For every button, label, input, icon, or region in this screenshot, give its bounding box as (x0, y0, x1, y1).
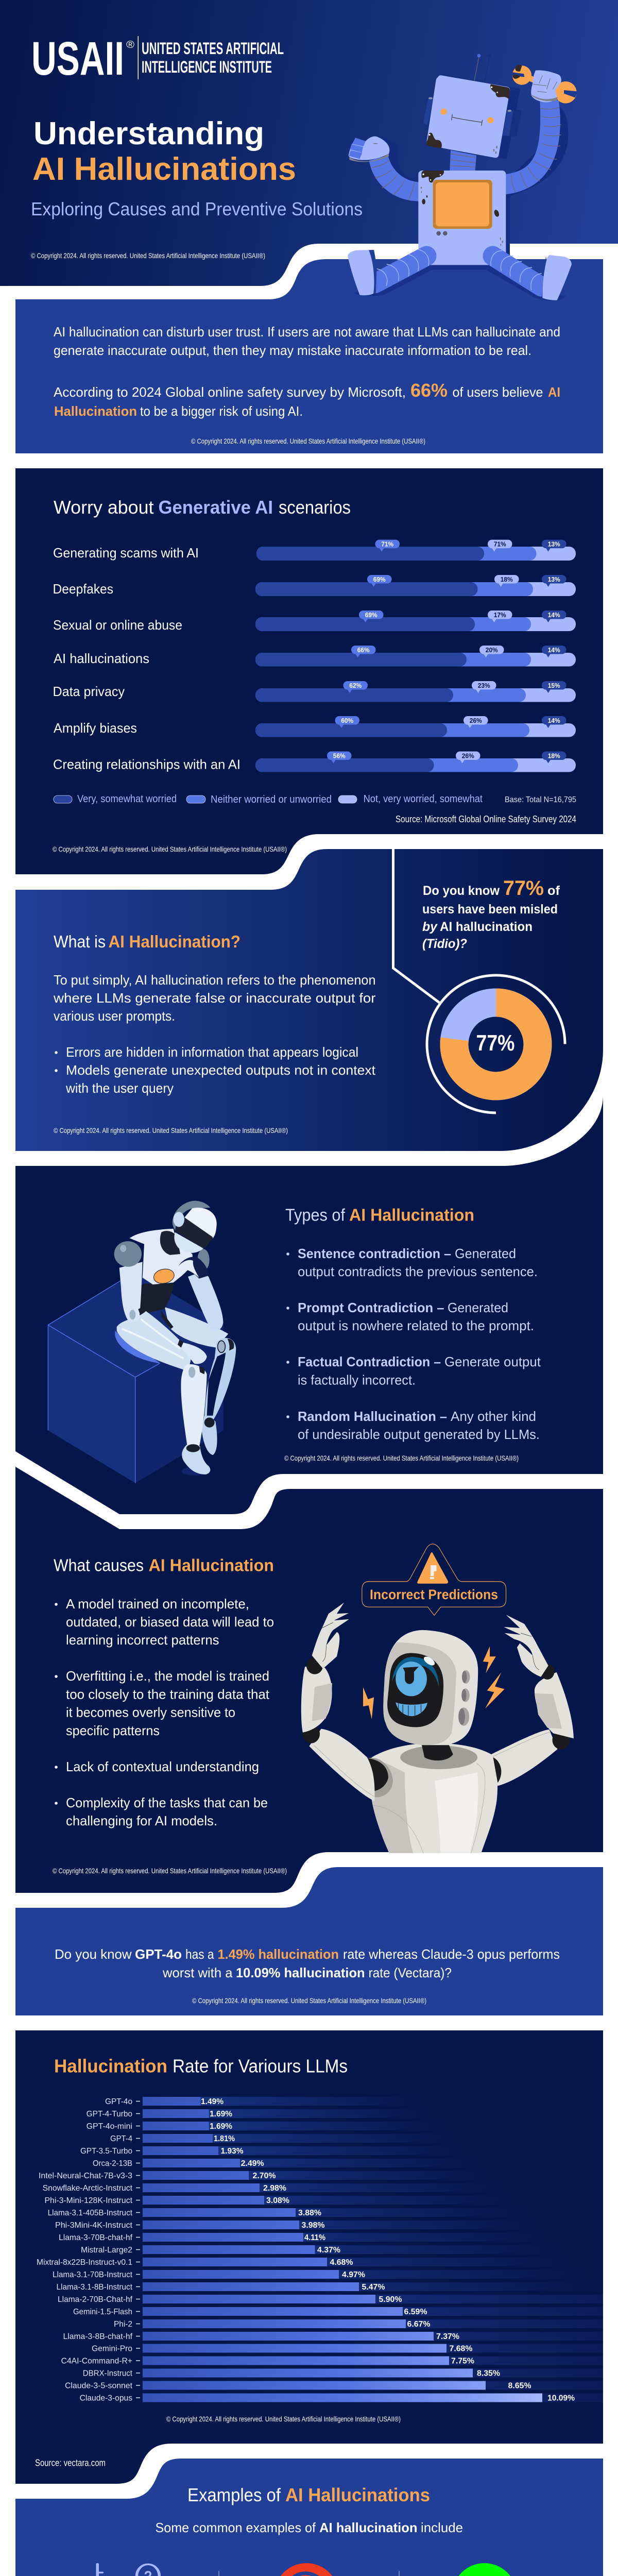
bar chart: hallucination rates: GPT-4-Turbo (87, 2110, 132, 2119)
legend: Neither worried or unworried (211, 794, 332, 805)
panel: Worry about Generative AI scenarios (15, 468, 603, 874)
heading: AI Hallucination (148, 1556, 274, 1574)
chart row: Creating relationships with an AI: 18% (548, 752, 560, 759)
logo: USAII (31, 32, 284, 85)
bar chart: hallucination rates: Llama-3.1-405B-Instruct (48, 2209, 133, 2217)
text block: user trust (54, 324, 560, 358)
icon: false negative cross (452, 2563, 517, 2576)
title: Understanding (33, 116, 264, 151)
chart row: Creating relationships with an AI: 56% (333, 752, 346, 759)
bar chart: hallucination rates: 1.49% (201, 2097, 224, 2106)
subheading: include (421, 2520, 463, 2535)
source note: Source: Microsoft Global Online Safety Survey 2024 (396, 814, 576, 824)
copyright: © Copyright 2024. All rights reserved. United States Artificial Intelligence Institute (USAII®) (166, 2415, 401, 2423)
bullet: Sentence contradiction: output contradicts the previous sentence. (298, 1264, 538, 1279)
chart row: AI hallucinations: 20% (486, 646, 498, 654)
bar chart: hallucination rates: 3.08% (266, 2196, 289, 2205)
text block: hallucination rates: rate (Vectara)? (369, 1965, 452, 1980)
bar chart: hallucination rates: 7.68% (449, 2344, 473, 2353)
text block: 66 percent: Hallucination (54, 403, 137, 419)
chart row: Sexual or online abuse: Sexual or online abuse (53, 617, 182, 633)
text block: 66 percent: 66% (410, 380, 448, 401)
text block: 66 percent (54, 380, 560, 419)
bar chart: hallucination rates: 7.37% (436, 2332, 459, 2341)
bullet: Prompt Contradiction: Prompt Contradiction – (298, 1300, 444, 1315)
bullet list: characteristics (55, 1044, 376, 1096)
bullet: Sentence contradiction (286, 1246, 538, 1279)
subtitle: Exploring Causes and Preventive Solutions (31, 198, 363, 219)
bar chart: hallucination rates: DBRX-Instruct (83, 2369, 133, 2378)
callout text: 77 percent: 77% (503, 877, 544, 900)
bar chart: hallucination rates: GPT-4o-mini (87, 2122, 132, 2131)
bullet list: characteristics: Models generate unexpected outputs not in context (66, 1062, 376, 1078)
chart row: Data privacy: 62% (349, 682, 362, 689)
heading: AI Hallucination? (108, 932, 241, 951)
bar chart: hallucination rates: Llama-3-8B-chat-hf (63, 2332, 133, 2341)
chart row: Creating relationships with an AI: 26% (462, 752, 474, 759)
heading (54, 932, 241, 951)
chart row: Generating scams with AI: 71% (494, 540, 506, 548)
text block: definition: To put simply, AI hallucination refers to the phenomenon (54, 972, 376, 988)
subheading: Some common examples of (156, 2520, 316, 2535)
bar chart: hallucination rates: 1.69% (210, 2110, 232, 2119)
bullet: Sentence contradiction: Sentence contradiction – (298, 1246, 451, 1261)
logo: USAII: ® (126, 40, 134, 50)
callout text: 77 percent: of (547, 884, 560, 898)
chart row: Amplify biases: 60% (341, 717, 354, 724)
panel: Hallucination Rate for Various LLMs (15, 2030, 603, 2484)
bar chart: hallucination rates: Phi-3-Mini-128K-Instruct (44, 2196, 133, 2205)
chart row: Creating relationships with an AI: Creating relationships with an AI (53, 756, 241, 772)
bullet: Random Hallucination (286, 1409, 540, 1442)
chart row: Generating scams with AI: 71% (381, 540, 394, 548)
text block: user trust: AI hallucination can disturb user trust. If users are not aware that LLMs can hallucinate and (54, 324, 560, 340)
chart row: Deepfakes: 18% (501, 575, 513, 583)
bar chart: hallucination rates: 7.75% (451, 2357, 474, 2366)
chart row: Generating scams with AI (53, 540, 576, 561)
copyright: © Copyright 2024. All rights reserved. United States Artificial Intelligence Institute (USAII®) (54, 1126, 288, 1134)
logo: USAII: INTELLIGENCE INSTITUTE (142, 58, 272, 76)
panel: What causes AI Hallucination (15, 1467, 603, 1893)
callout text: 77 percent: by (422, 920, 438, 934)
text block: hallucination rates: worst with a (162, 1965, 233, 1980)
chart row: AI hallucinations: AI hallucinations (54, 651, 149, 666)
bullet: incomplete data: A model trained on incomplete, (66, 1596, 249, 1612)
bar chart: hallucination rates: Phi-3Mini-4K-Instruct (55, 2221, 133, 2230)
bullet: Random Hallucination: Any other kind (451, 1409, 536, 1424)
bar chart: hallucination rates: 1.93% (220, 2147, 243, 2156)
text block: 66 percent: AI (548, 384, 560, 400)
chart row: AI hallucinations: 66% (357, 646, 370, 654)
bullet: Factual Contradiction (286, 1354, 541, 1388)
bullet: task complexity: Complexity of the tasks that can be (66, 1795, 268, 1810)
bullet: Sentence contradiction: Generated (455, 1246, 516, 1261)
chart row: Data privacy: Data privacy (53, 684, 125, 699)
chart row: Deepfakes: 13% (548, 575, 560, 583)
base note: Base: Total N=16,795 (505, 795, 576, 804)
callout text: 77 percent: (Tidio)? (422, 937, 467, 951)
bullet: Prompt Contradiction (286, 1300, 534, 1333)
text block: hallucination rates: rate whereas Claude-3 opus performs (343, 1946, 560, 1962)
chart row: Deepfakes (53, 575, 576, 597)
icon: hero robot with wrench (348, 54, 578, 300)
callout text: 77 percent: Do you know (423, 884, 500, 898)
heading: AI Hallucinations (285, 2484, 430, 2505)
heading (54, 2056, 348, 2076)
bullet list: characteristics: Errors are hidden in information that appears logical (66, 1044, 358, 1060)
heading: What causes (54, 1556, 144, 1574)
bar chart: hallucination rates: GPT-4 (110, 2134, 132, 2143)
chart row: Data privacy: 15% (548, 682, 560, 689)
bar chart: hallucination rates: 6.59% (404, 2308, 427, 2316)
subheading (156, 2520, 463, 2535)
panel: GPT-4o versus Claude-3 callout (15, 1867, 603, 2015)
bar chart: hallucination rates: 1.81% (214, 2134, 235, 2143)
bar chart: hallucination rates: 2.98% (263, 2184, 286, 2193)
icon: white robot with warning (301, 1544, 574, 1853)
bar chart: hallucination rates: 5.90% (379, 2295, 402, 2304)
bar chart: hallucination rates: 1.69% (210, 2122, 232, 2131)
chart row: Sexual or online abuse (53, 611, 576, 633)
bullet: Prompt Contradiction: output is nowhere related to the prompt. (298, 1318, 534, 1333)
source note: Source: vectara.com (35, 2458, 106, 2468)
panel: What is AI Hallucination (15, 849, 603, 1151)
bullet: Random Hallucination: Random Hallucination – (298, 1409, 447, 1424)
heading: Generative AI (159, 497, 273, 518)
bar chart: hallucination rates: GPT-3.5-Turbo (80, 2147, 132, 2156)
chart row: AI hallucinations: 14% (548, 646, 560, 654)
bullet: incomplete data (55, 1596, 274, 1648)
bullet: incomplete data: outdated, or biased data will lead to (66, 1614, 274, 1630)
bar chart: hallucination rates: 5.47% (362, 2283, 385, 2292)
heading (187, 2484, 430, 2505)
callout text: 77 percent: AI hallucination (440, 920, 533, 934)
text block: 66 percent: According to 2024 Global online safety survey by Microsoft, (54, 384, 406, 400)
chart row: Deepfakes: 69% (373, 575, 386, 583)
text block: 66 percent: to be a bigger risk of using AI. (140, 403, 303, 419)
copyright: © Copyright 2024. All rights reserved. United States Artificial Intelligence Institute (USAII®) (192, 1996, 426, 2005)
bar chart: hallucination rates: 2.49% (241, 2159, 264, 2168)
chart row: Data privacy: 23% (478, 682, 490, 689)
text block: definition: where LLMs generate false or inaccurate output for (53, 990, 376, 1006)
heading: Types of (285, 1206, 346, 1224)
copyright: © Copyright 2024. All rights reserved. United States Artificial Intelligence Institute (USAII®) (284, 1454, 519, 1462)
bar chart: hallucination rates: Intel-Neural-Chat-7B-v3-3 (39, 2172, 132, 2180)
bar chart: hallucination rates: Llama-2-70B-Chat-hf (58, 2295, 133, 2304)
bar chart: hallucination rates: 2.70% (252, 2172, 276, 2180)
bar chart: hallucination rates: Llama-3.1-70B-Instruct (53, 2270, 133, 2279)
subheading: AI hallucination (319, 2520, 417, 2535)
text block: hallucination rates: Do you know (55, 1946, 132, 1962)
chart row: Generating scams with AI: Generating scams with AI (53, 545, 199, 561)
chart row: Sexual or online abuse: 69% (365, 611, 377, 619)
text block: hallucination rates (55, 1946, 560, 1980)
donut chart: 77 percent: 77% (476, 1030, 515, 1056)
text block: user trust: generate inaccurate output, then they may mistake inaccurate information to be real. (54, 343, 531, 358)
bar chart: hallucination rates: GPT-4o (105, 2097, 132, 2106)
bullet list: characteristics: with the user query (65, 1080, 174, 1096)
panel: Examples of AI Hallucinations (15, 2459, 603, 2576)
bullet: overfitting: too closely to the training data that (66, 1687, 270, 1702)
copyright: © Copyright 2024. All rights reserved. United States Artificial Intelligence Institute (USAII®) (53, 1867, 287, 1875)
title: AI Hallucinations (32, 151, 296, 187)
heading (54, 497, 351, 518)
bar chart: hallucination rates: Orca-2-13B (93, 2159, 132, 2168)
bar chart: hallucination rates: Mistral-Large2 (81, 2246, 132, 2255)
heading: What is (54, 932, 106, 951)
heading (54, 1556, 274, 1574)
logo: USAII: UNITED STATES ARTIFICIAL (142, 39, 284, 58)
bar chart: hallucination rates: Claude-3-opus (80, 2394, 132, 2403)
text block: hallucination rates: GPT-4o (135, 1946, 182, 1962)
legend: Very, somewhat worried (77, 793, 177, 805)
bar chart: hallucination rates: Gemini-1.5-Flash (73, 2308, 132, 2316)
text block: hallucination rates: 10.09% hallucination (236, 1965, 365, 1980)
text block: 66 percent: of users believe (452, 384, 543, 400)
copyright: © Copyright 2024. All rights reserved. United States Artificial Intelligence Institute (USAII®) (31, 251, 265, 260)
bar chart: hallucination rates: 4.97% (342, 2270, 365, 2279)
heading: AI Hallucination (349, 1206, 474, 1224)
bullet: Factual Contradiction: Factual Contradiction – (298, 1354, 441, 1369)
chart row: Amplify biases (54, 716, 576, 737)
bullet: task complexity (55, 1795, 268, 1828)
heading: Worry about (54, 497, 153, 518)
heading: Hallucination (54, 2056, 167, 2076)
icon: chart with question mark (97, 2564, 159, 2576)
bar chart: hallucination rates: Llama-3-70B-chat-hf (59, 2233, 133, 2242)
bullet: Prompt Contradiction: Generated (448, 1300, 508, 1315)
callout text: 77 percent: users have been misled (422, 902, 558, 917)
bar chart: hallucination rates: Mixtral-8x22B-Instruct-v0.1 (37, 2258, 132, 2267)
bullet: task complexity: challenging for AI models. (66, 1813, 217, 1828)
bar chart: hallucination rates: 4.68% (330, 2258, 353, 2267)
text block: hallucination rates: has a (185, 1946, 214, 1962)
bar chart: hallucination rates: Gemini-Pro (92, 2344, 132, 2353)
copyright: © Copyright 2024. All rights reserved. United States Artificial Intelligence Institute (USAII®) (53, 845, 287, 853)
bar chart: hallucination rates: 10.09% (547, 2394, 575, 2403)
heading: Examples of (187, 2484, 281, 2505)
bullet: overfitting: Overfitting i.e., the model is trained (66, 1668, 269, 1684)
chart row: Sexual or online abuse: 17% (494, 611, 506, 619)
chart row: Generating scams with AI: 13% (548, 540, 560, 548)
chart row: Creating relationships with an AI (53, 751, 576, 772)
chart row: Sexual or online abuse: 14% (548, 611, 560, 619)
bullet: overfitting: it becomes overly sensitive to (66, 1705, 235, 1720)
bullet: overfitting: specific patterns (66, 1723, 160, 1738)
text block: hallucination rates: 1.49% hallucination (217, 1946, 339, 1962)
label: Incorrect Predictions: Incorrect Predictions (370, 1587, 498, 1602)
bar chart: hallucination rates: C4AI-Command-R+ (61, 2357, 132, 2366)
bar chart: hallucination rates: 4.11% (304, 2233, 325, 2242)
title (32, 116, 296, 187)
bar chart: hallucination rates: Phi-2 (114, 2320, 132, 2329)
bar chart: hallucination rates: Llama-3.1-8B-Instruct (57, 2283, 133, 2292)
bar chart: hallucination rates: 4.37% (317, 2246, 340, 2255)
callout text: 77 percent (422, 877, 560, 951)
legend (54, 793, 483, 805)
chart row: AI hallucinations (54, 646, 576, 667)
bullet: Random Hallucination: of undesirable output generated by LLMs. (298, 1427, 540, 1442)
callout frame (393, 849, 439, 1003)
chart row: Amplify biases: Amplify biases (54, 720, 137, 736)
bullet: Factual Contradiction: is factually incorrect. (298, 1372, 416, 1388)
bullet: Factual Contradiction: Generate output (444, 1354, 541, 1369)
bar chart: hallucination rates (37, 2097, 603, 2403)
heading: scenarios (279, 497, 351, 518)
logo: USAII: USAII (31, 32, 124, 85)
bar chart: hallucination rates: 8.65% (508, 2381, 531, 2391)
bar chart: hallucination rates: 8.35% (477, 2369, 500, 2378)
heading (285, 1206, 474, 1224)
chart row: Data privacy (53, 681, 576, 702)
bullet: incomplete data: learning incorrect patterns (66, 1632, 219, 1648)
bar chart: hallucination rates: Claude-3-5-sonnet (65, 2381, 133, 2391)
text block: definition: various user prompts. (54, 1008, 175, 1024)
bar chart: hallucination rates: 6.67% (407, 2320, 431, 2329)
panel: intro (15, 259, 603, 453)
chart row: Amplify biases: 14% (548, 717, 560, 724)
copyright: © Copyright 2024. All rights reserved. United States Artificial Intelligence Institute (USAII®) (191, 437, 425, 445)
bar chart: hallucination rates: 3.88% (298, 2209, 321, 2217)
bar chart: hallucination rates: Snowflake-Arctic-Instruct (43, 2184, 133, 2193)
icon: cube with thinking robot (48, 1201, 236, 1483)
heading: Rate for Variours LLMs (173, 2056, 348, 2076)
panel: hero (0, 0, 618, 286)
chart row: Deepfakes: Deepfakes (53, 581, 113, 597)
icon: false positive check (274, 2563, 339, 2576)
bullet: overfitting (55, 1668, 270, 1738)
panel: Types of AI Hallucination (15, 1095, 603, 1514)
bullet: contextual understanding: Lack of contextual understanding (66, 1759, 259, 1774)
bar chart: hallucination rates: 3.98% (302, 2221, 324, 2230)
donut chart: 77 percent (427, 975, 565, 1113)
text block: definition (53, 972, 376, 1024)
chart row: Amplify biases: 26% (470, 717, 482, 724)
legend: Not, very worried, somewhat (364, 793, 483, 805)
